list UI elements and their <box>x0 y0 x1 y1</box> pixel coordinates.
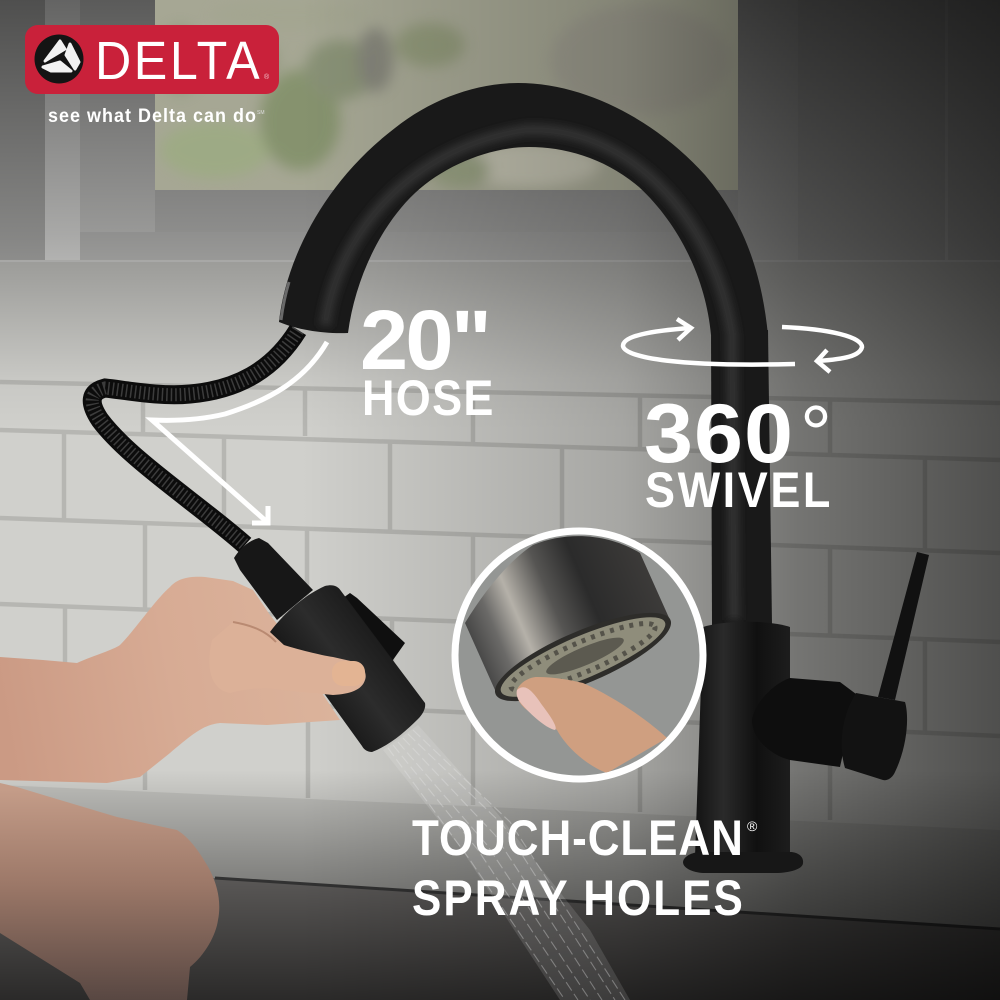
sprayer body <box>270 585 425 752</box>
hose length label: HOSE <box>362 371 493 427</box>
faucet spout <box>279 83 768 335</box>
registered mark: ® <box>264 73 270 81</box>
hand <box>0 577 340 783</box>
faucet body <box>695 622 790 857</box>
aerator metal <box>465 536 670 698</box>
water spray <box>383 725 630 1000</box>
thumb nail <box>332 661 365 686</box>
handle neck <box>752 678 856 767</box>
swivel label: 360 <box>644 387 793 481</box>
bottom shading <box>0 770 1000 1000</box>
touch-clean inset circle <box>455 531 703 779</box>
touch-clean label: ® <box>747 818 758 834</box>
window frame <box>0 0 1000 262</box>
spray face <box>495 613 671 702</box>
faucet base <box>683 852 803 873</box>
logo badge <box>25 25 279 94</box>
swivel label: SWIVEL <box>645 463 830 519</box>
Delta logo <box>25 25 279 126</box>
spout highlight <box>325 130 734 620</box>
tagline: see what Delta can do <box>48 104 256 126</box>
hose length label: 20" <box>360 294 492 388</box>
fingertip <box>517 677 667 773</box>
finger nail <box>517 687 556 730</box>
swivel label: ° <box>800 389 832 478</box>
forearm foreground <box>0 783 219 1000</box>
logo icon <box>34 34 84 84</box>
fold shadow <box>233 622 276 642</box>
swivel arrows <box>623 319 862 372</box>
handle cap <box>842 693 907 780</box>
connector <box>234 538 313 620</box>
hose length label <box>360 294 493 427</box>
riser <box>711 330 772 625</box>
top shading <box>0 0 1000 430</box>
sprayer button <box>340 593 405 667</box>
lever <box>878 552 929 700</box>
faucet <box>279 83 929 873</box>
touch-clean label: TOUCH-CLEAN <box>412 809 743 866</box>
swivel label <box>644 387 832 519</box>
subway tile wall <box>0 382 1000 820</box>
nozzle edge highlight <box>281 282 289 320</box>
right shading <box>300 0 1000 1000</box>
sprayer head <box>234 538 425 752</box>
window glass with blurred foliage <box>155 0 738 190</box>
touch-clean label <box>412 809 758 926</box>
logo wordmark: DELTA <box>95 31 260 91</box>
pull-down hose <box>92 330 298 545</box>
service mark: SM <box>257 110 264 116</box>
touch-clean label: SPRAY HOLES <box>412 869 743 926</box>
countertop <box>0 785 1000 1000</box>
thumb over sprayer <box>209 622 366 695</box>
hose arrow <box>152 342 327 523</box>
